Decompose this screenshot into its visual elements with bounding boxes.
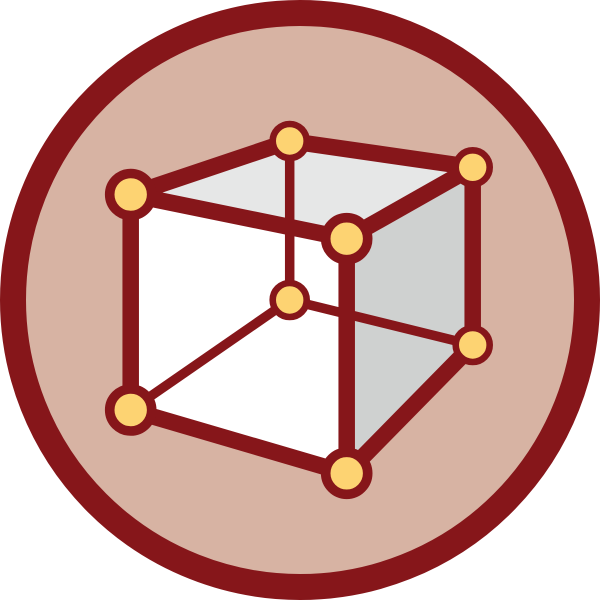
face: white interior xyxy=(131,194,347,473)
face: top light grey xyxy=(131,141,473,239)
face: right grey xyxy=(347,167,473,473)
cube thick front edges xyxy=(131,141,473,473)
cube thin back edges xyxy=(131,141,473,410)
cube faces xyxy=(131,141,473,473)
cube vertex nodes xyxy=(110,124,490,494)
face: white floor xyxy=(131,300,473,473)
